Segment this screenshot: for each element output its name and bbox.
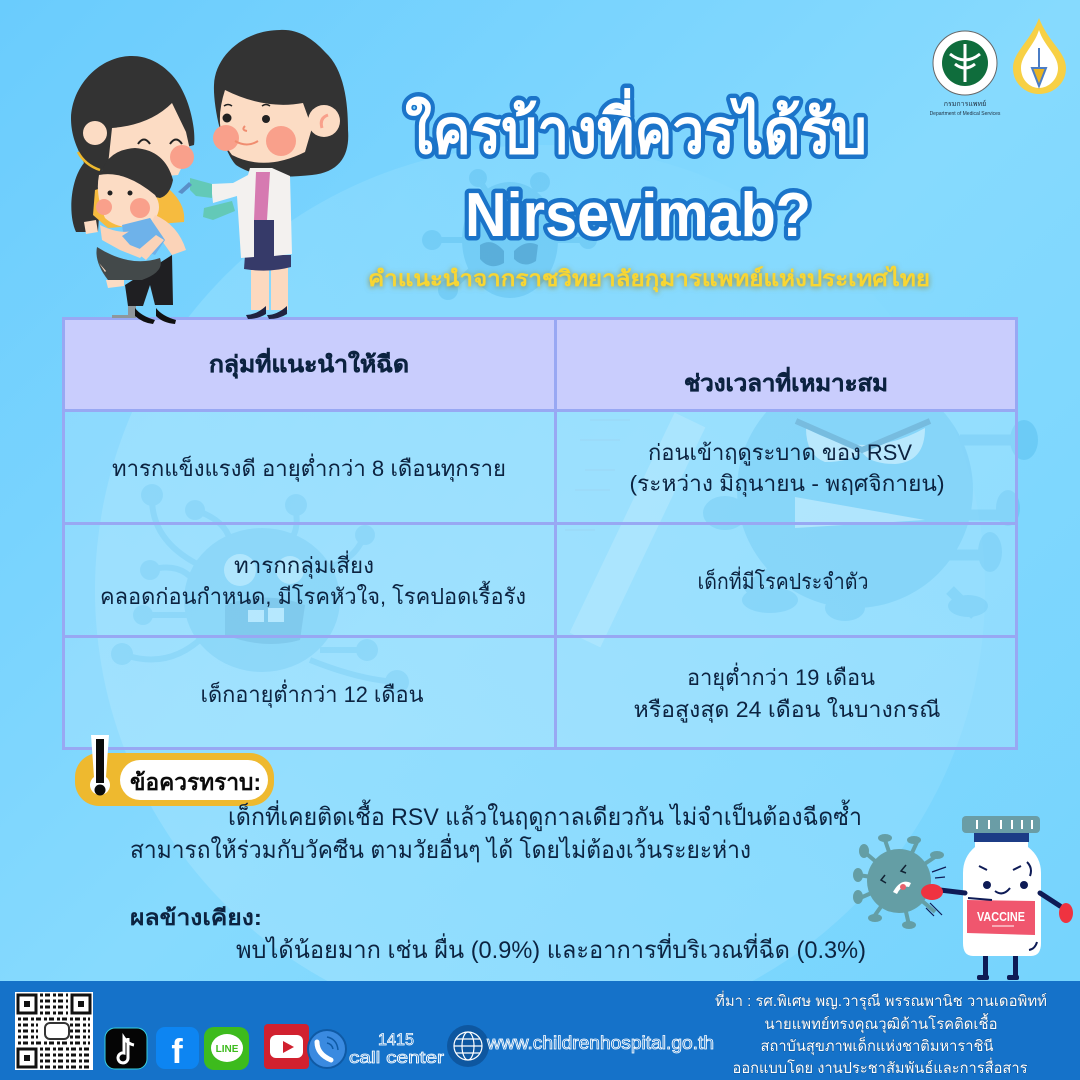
source credits: ออกแบบโดย งานประชาสัมพันธ์และการสื่อสาร — [732, 1057, 1028, 1077]
row 3 left: เด็กอายุต่ำกว่า 12 เดือน — [200, 679, 424, 708]
row 2 left — [100, 550, 526, 609]
icon: LINE: LINE — [216, 1044, 239, 1055]
icon: exclamation mark — [90, 735, 110, 796]
lab coat — [211, 168, 292, 258]
skirt — [244, 255, 291, 271]
row 3 right — [634, 662, 940, 723]
background virus: top — [422, 169, 597, 300]
call center label: call center — [349, 1048, 444, 1067]
row 1 left: ทารกแข็งแรงดี อายุต่ำกว่า 8 เดือนทุกราย — [112, 453, 506, 482]
title line 1: ใครบ้างที่ควรได้รับ — [405, 88, 867, 167]
gloves — [190, 178, 235, 220]
source credits — [715, 990, 1047, 1077]
illustration: mother, child and doctor — [71, 30, 348, 324]
illustration: virus — [853, 834, 946, 929]
QR code — [15, 992, 93, 1070]
row 1 right — [630, 440, 944, 497]
row 1 right: (ระหว่าง มิถุนายน - พฤศจิกายน) — [630, 471, 944, 497]
row 2 left: คลอดก่อนกำหนด, มีโรคหัวใจ, โรคปอดเรื้อรัง — [100, 581, 526, 609]
side effects — [130, 905, 866, 964]
icon: Facebook — [156, 1027, 199, 1071]
row 2 left: ทารกกลุ่มเสี่ยง — [234, 550, 374, 579]
row 3 right: หรือสูงสุด 24 เดือน ในบางกรณี — [634, 697, 940, 723]
logo: Department of Medical Services — [930, 31, 1001, 117]
table header row — [62, 317, 1017, 410]
footer — [0, 981, 1080, 1080]
call center label: 1415 — [378, 1030, 414, 1049]
row 3 right: อายุต่ำกว่า 19 เดือน — [687, 662, 875, 691]
notice badge — [75, 735, 274, 806]
background virus: left — [111, 484, 409, 694]
notice body — [130, 799, 862, 864]
icon: LINE — [204, 1027, 249, 1070]
row 2 right: เด็กที่มีโรคประจำตัว — [698, 566, 868, 594]
source credits: นายแพทย์ทรงคุณวุฒิด้านโรคติดเชื้อ — [764, 1013, 998, 1034]
icon: YouTube — [264, 1024, 309, 1069]
logo: Department of Medical Services: กรมการแพทย์ — [944, 100, 986, 108]
icon: TikTok — [105, 1028, 147, 1069]
notice body: สามารถให้ร่วมกับวัคซีน ตามวัยอื่นๆ ได้ โดยไม่ต้องเว้นระยะห่าง — [130, 833, 751, 864]
background virus: mean — [703, 372, 1038, 621]
legs — [251, 265, 288, 310]
logo: gold drop — [1013, 18, 1066, 94]
website: www.childrenhospital.go.th — [486, 1033, 714, 1053]
title line 2: Nirsevimab? — [465, 181, 811, 250]
mother holding child — [71, 56, 194, 324]
logo: Department of Medical Services: Department of Medical Services — [930, 111, 1001, 117]
icon: phone — [308, 1030, 346, 1068]
column heading: target group: กลุ่มที่แนะนำให้ฉีด — [209, 347, 409, 379]
source credits: ที่มา : รศ.พิเศษ พญ.วารุณี พรรณพานิช วานเดอพิทท์ — [715, 990, 1047, 1011]
title — [405, 88, 867, 250]
background syringe — [565, 420, 690, 640]
table grid — [62, 318, 1017, 749]
illustration: vaccine bottle — [921, 816, 1073, 980]
subtitle: คำแนะนำจากราชวิทยาลัยกุมารแพทย์แห่งประเทศไทย — [368, 265, 930, 293]
icon: globe — [447, 1025, 489, 1067]
row 1 right: ก่อนเข้าฤดูระบาด ของ RSV — [648, 440, 912, 466]
side effects: ผลข้างเคียง: — [130, 905, 262, 930]
column heading: timing: ช่วงเวลาที่เหมาะสม — [684, 366, 888, 396]
icon: Facebook: f — [171, 1033, 183, 1071]
call center label — [349, 1030, 444, 1067]
ponytail and hair — [71, 56, 194, 232]
child — [96, 148, 186, 260]
side effects: พบได้น้อยมาก เช่น ผื่น (0.9%) และอาการที่บริเวณที่ฉีด (0.3%) — [236, 933, 866, 964]
table — [62, 317, 1017, 749]
illustration: vaccine bottle: VACCINE — [977, 909, 1025, 924]
table body cells — [62, 410, 1017, 749]
source credits: สถาบันสุขภาพเด็กแห่งชาติมหาราชินี — [760, 1036, 994, 1056]
notice body: เด็กที่เคยติดเชื้อ RSV แล้วในฤดูกาลเดียวกัน ไม่จำเป็นต้องฉีดซ้ำ — [228, 799, 862, 832]
notice label: ข้อควรทราบ: — [130, 769, 261, 795]
trousers, chair and shoes — [112, 300, 136, 318]
doctor — [178, 30, 348, 319]
